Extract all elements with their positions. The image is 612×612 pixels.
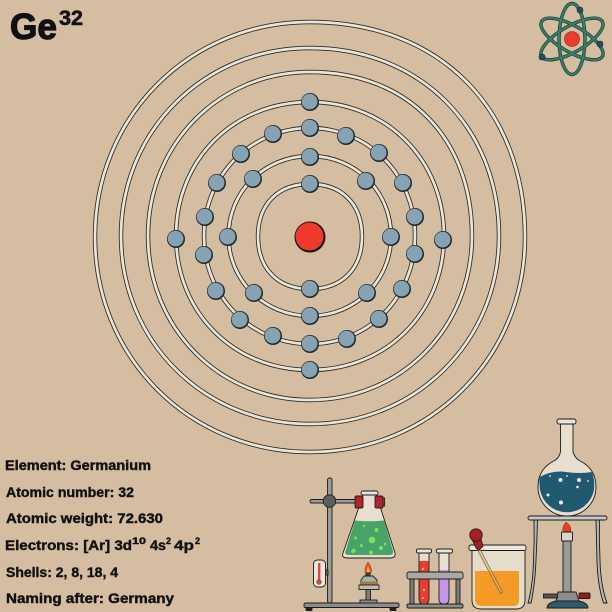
thermometer [314, 560, 328, 587]
flask [343, 491, 395, 558]
beaker glass [472, 550, 525, 609]
orange liquid [475, 571, 519, 606]
fact: electrons: 2 [166, 536, 171, 546]
electrons shell 3 [195, 119, 424, 353]
rack back legs and base [407, 578, 463, 608]
element facts text block [5, 458, 200, 606]
beaker with orange liquid and pipette [469, 529, 526, 609]
bunsen burner [544, 532, 590, 608]
orbit rings [95, 22, 525, 452]
fact: shells: Shells: 2, 8, 18, 4 [6, 565, 119, 580]
atom diagram: electron shells [95, 22, 525, 452]
spirit burner [359, 562, 379, 603]
icon: atom [535, 4, 609, 74]
rack top bar [407, 572, 463, 579]
fact: atomic number: Atomic number: 32 [6, 485, 134, 500]
title: Ge 32: Ge [10, 6, 57, 47]
fact: element: Element: Germanium [5, 458, 151, 473]
fact: electrons: Electrons: [Ar] 3d [5, 538, 132, 553]
nucleus [294, 222, 326, 252]
fact: electrons: 4p [174, 538, 194, 553]
round flask [538, 419, 596, 516]
fact: electrons: 2 [195, 536, 200, 546]
test tubes in rack [407, 549, 463, 608]
tripod [528, 516, 607, 603]
fact: electrons [5, 536, 200, 553]
fact: naming: Naming after: Germany [6, 591, 175, 606]
red test tube [416, 549, 432, 604]
electrons shell 2 [219, 148, 400, 325]
clamp knot [323, 495, 336, 507]
electrons shell 4 [167, 93, 452, 379]
purple test tube [436, 549, 452, 604]
bunsen flame [563, 522, 571, 533]
fact: atomic weight: Atomic weight: 72.630 [6, 511, 163, 526]
stand base and feet [304, 603, 399, 610]
round flask with blue liquid on tripod and bunsen burner [528, 419, 607, 608]
title: Ge 32 [10, 6, 83, 47]
lab stand with conical flask [304, 478, 399, 610]
red clamp pads [355, 496, 385, 508]
clamp arm [310, 500, 357, 503]
stand rod [328, 478, 332, 603]
fact: electrons: 10 [132, 536, 146, 546]
fact: electrons: 4s [150, 538, 166, 553]
electrons shell 1 [301, 175, 319, 298]
title: Ge 32: 32 [59, 7, 83, 30]
pipette [470, 529, 502, 594]
beaker lip [469, 545, 526, 550]
